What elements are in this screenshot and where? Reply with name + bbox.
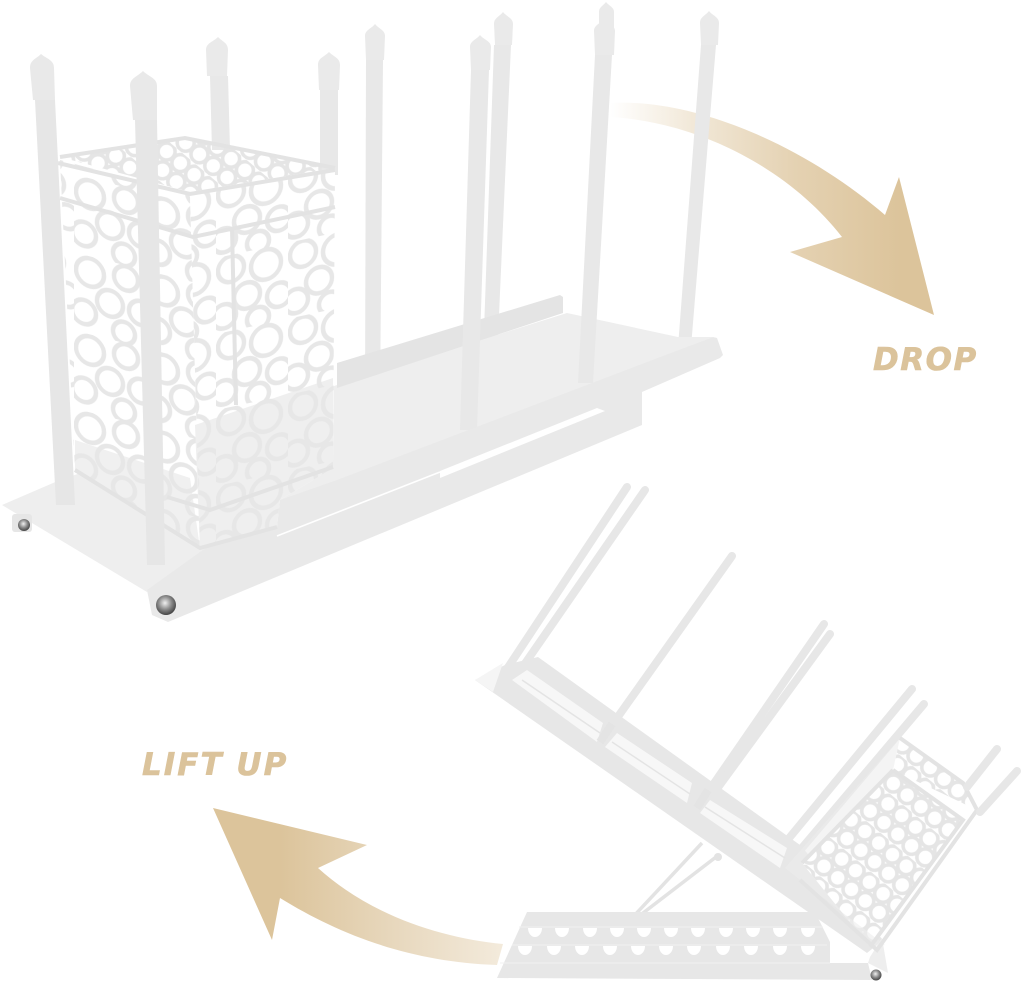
tray front lip and lower rail [147,337,723,622]
basket side band [785,738,900,947]
pole feet over panel [600,724,708,808]
label: LIFT UP: LIFT UP [142,747,288,783]
folded base [497,912,872,980]
basket face [802,770,963,947]
arrow: drop [610,103,934,315]
base ridges [500,927,830,963]
mid poles standing on tray [460,19,615,430]
front screw [156,595,176,615]
rack poles [503,487,924,868]
back poles [206,2,719,400]
panel end triangle [868,938,888,973]
rack panel [475,657,883,953]
tray plate [2,313,713,592]
basket opening [60,138,335,192]
rear wheel [12,514,32,532]
label: DROP: DROP [873,342,978,378]
basket rim and edges [58,138,335,548]
rack upright view [2,2,723,622]
hinge screw [870,970,882,980]
stand legs [605,843,722,947]
panel slots [512,670,787,868]
basket right face [190,168,335,548]
pole tips beyond basket [967,749,1017,812]
basket rim [800,738,977,950]
basket top band [893,738,977,810]
arrow: lift up [213,808,503,965]
rack tilted view [475,487,1017,980]
base holes [518,928,815,955]
slot ridge lines [522,680,785,858]
tray back flange [337,295,563,388]
white slit between lip and rail [440,408,605,478]
panel end tip [475,663,503,692]
basket left face [60,160,200,548]
front poles [30,54,165,565]
